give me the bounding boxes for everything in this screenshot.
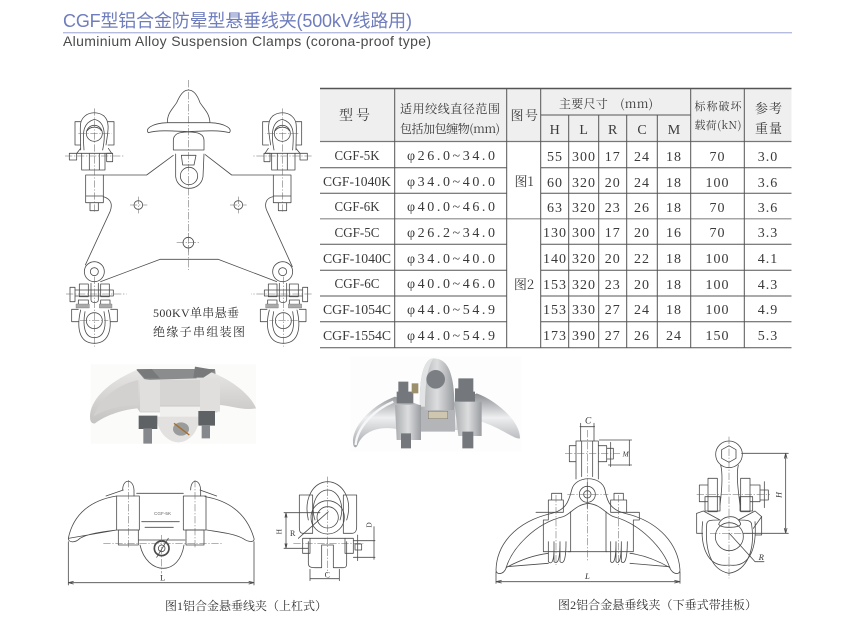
table body: 100 bbox=[706, 303, 730, 318]
diagram: figure 2 clamp front view: C bbox=[585, 416, 592, 426]
table body: 320 bbox=[572, 176, 596, 191]
diagram: figure 1 clamp front view: CGF-5K bbox=[154, 511, 172, 516]
diagram: 500KV insulator string assembly bbox=[65, 80, 312, 347]
table body: φ44.0~54.9 bbox=[407, 329, 495, 344]
diagram: figure 1 clamp front view: L bbox=[160, 573, 165, 583]
table body bbox=[323, 149, 778, 344]
table header: 重量 bbox=[755, 118, 783, 137]
table body: 18 bbox=[666, 278, 682, 293]
table body: 3.6 bbox=[758, 201, 778, 216]
diagram: figure 1 clamp side view: C bbox=[325, 570, 330, 579]
dimension labels bbox=[496, 423, 680, 583]
table body: 70 bbox=[710, 226, 726, 241]
table header: 主要尺寸 (mm) bbox=[559, 95, 653, 112]
table body: 22 bbox=[634, 252, 650, 267]
table body: 150 bbox=[706, 329, 730, 344]
table body: φ34.0~40.0 bbox=[407, 252, 495, 267]
diagram: figure 1 clamp side view bbox=[275, 477, 375, 581]
assembly caption: 绝缘子串组装图 bbox=[153, 324, 245, 339]
table body: 320 bbox=[572, 278, 596, 293]
table header: 型号 bbox=[339, 105, 373, 125]
table body: φ40.0~46.0 bbox=[407, 200, 495, 215]
table body: φ40.0~46.0 bbox=[407, 277, 495, 292]
table body: 300 bbox=[572, 150, 596, 165]
yoke plate outline bbox=[85, 155, 292, 282]
table body: 20 bbox=[605, 176, 621, 191]
table body: 153 bbox=[543, 303, 567, 318]
table: specifications bbox=[320, 88, 792, 348]
table header bbox=[339, 95, 783, 138]
diagram: figure 1 clamp front view bbox=[68, 480, 254, 585]
table body: CGF-5K bbox=[334, 149, 380, 164]
title rule bbox=[63, 32, 792, 33]
table body: 173 bbox=[543, 329, 567, 344]
table body: φ34.0~40.0 bbox=[407, 175, 495, 190]
diagram: figure 2 clamp side view: H bbox=[775, 491, 784, 499]
assembly caption bbox=[153, 305, 245, 339]
table body: 24 bbox=[634, 176, 650, 191]
table header: H bbox=[550, 123, 560, 138]
table body: 18 bbox=[666, 176, 682, 191]
table header: 参考 bbox=[755, 98, 783, 117]
diagram: figure 1 clamp side view: D bbox=[365, 522, 374, 528]
table body: 图1 bbox=[514, 171, 534, 190]
table body: 3.6 bbox=[758, 176, 778, 191]
table body: 23 bbox=[605, 201, 621, 216]
table body: 27 bbox=[605, 303, 621, 318]
table body: 300 bbox=[572, 226, 596, 241]
table body: 20 bbox=[634, 278, 650, 293]
table body: 3.0 bbox=[758, 150, 778, 165]
table body: 3.3 bbox=[758, 226, 778, 241]
table body: φ26.2~34.0 bbox=[407, 226, 495, 241]
assembly caption: 500KV单串悬垂 bbox=[153, 305, 239, 320]
table body: 70 bbox=[710, 150, 726, 165]
table body: 5.3 bbox=[758, 329, 778, 344]
caption: figure 2: 图2铝合金悬垂线夹（下垂式带挂板） bbox=[558, 597, 757, 612]
table header: 图号 bbox=[510, 105, 540, 124]
table body: 63 bbox=[547, 201, 563, 216]
table body: 20 bbox=[605, 252, 621, 267]
table body: 17 bbox=[605, 226, 621, 241]
diagram: figure 2 clamp side view bbox=[697, 437, 788, 578]
table body: CGF-1040C bbox=[323, 252, 391, 267]
table body: 60 bbox=[547, 176, 563, 191]
icon: insulator bbox=[147, 90, 230, 150]
table body: 4.3 bbox=[758, 278, 778, 293]
diagram: figure 1 clamp side view: H bbox=[275, 528, 284, 534]
table body: CGF-6K bbox=[334, 200, 380, 215]
table body: CGF-5C bbox=[334, 226, 380, 241]
table header: C bbox=[637, 123, 647, 138]
table body: 153 bbox=[543, 278, 567, 293]
table body: 330 bbox=[572, 303, 596, 318]
table body: 55 bbox=[547, 150, 563, 165]
table body: 23 bbox=[605, 278, 621, 293]
table body: 17 bbox=[605, 150, 621, 165]
table body: 24 bbox=[634, 150, 650, 165]
table body: 70 bbox=[710, 201, 726, 216]
table body: φ44.0~54.9 bbox=[407, 303, 495, 318]
table header: R bbox=[608, 123, 618, 138]
table body: 18 bbox=[666, 201, 682, 216]
diagram: figure 2 clamp front view: L bbox=[584, 571, 590, 581]
table body: 16 bbox=[666, 226, 682, 241]
table header: L bbox=[579, 123, 588, 138]
table body: 26 bbox=[634, 329, 650, 344]
photo: overhead type clamp bbox=[90, 364, 256, 444]
subtitle: Aluminium Alloy Suspension Clamps (corona-proof type) bbox=[63, 33, 431, 49]
table body: φ26.0~34.0 bbox=[407, 149, 495, 164]
table header: 包括加包缠物(mm) bbox=[400, 120, 500, 137]
diagram: figure 2 clamp side view: R bbox=[758, 552, 765, 562]
table body: 20 bbox=[634, 226, 650, 241]
photo: suspension type clamp with lug bbox=[350, 357, 522, 452]
table body: CGF-6C bbox=[334, 277, 380, 292]
diagram: figure 2 clamp front view: M bbox=[622, 450, 630, 459]
diagram: figure 1 clamp side view: R bbox=[290, 529, 296, 538]
table body: 4.1 bbox=[758, 252, 778, 267]
title: CGF型铝合金防晕型悬垂线夹(500kV线路用) bbox=[63, 11, 412, 31]
table header: 适用绞线直径范围 bbox=[400, 100, 500, 117]
table body: 100 bbox=[706, 252, 730, 267]
table body: 390 bbox=[572, 329, 596, 344]
table header: 标称破坏 bbox=[694, 98, 742, 114]
table body: 24 bbox=[666, 329, 682, 344]
table body: CGF-1054C bbox=[323, 303, 391, 318]
table body: 320 bbox=[572, 252, 596, 267]
table body: 24 bbox=[634, 303, 650, 318]
table body: 27 bbox=[605, 329, 621, 344]
table body: 100 bbox=[706, 176, 730, 191]
table body: 140 bbox=[543, 252, 567, 267]
table body: CGF-1554C bbox=[323, 329, 391, 344]
table body: 18 bbox=[666, 252, 682, 267]
table body: 18 bbox=[666, 150, 682, 165]
table body: 100 bbox=[706, 278, 730, 293]
table header: M bbox=[668, 123, 681, 138]
diagram: figure 2 clamp front view bbox=[496, 416, 680, 583]
table body: 320 bbox=[572, 201, 596, 216]
table body: 图2 bbox=[514, 274, 534, 293]
table body: 4.9 bbox=[758, 303, 778, 318]
dimension L bbox=[68, 542, 254, 585]
table body: 130 bbox=[543, 226, 567, 241]
table header: 载荷(kN) bbox=[694, 117, 742, 133]
clevis bbox=[176, 154, 204, 188]
table body: 18 bbox=[666, 303, 682, 318]
caption: figure 1: 图1铝合金悬垂线夹（上杠式） bbox=[165, 598, 327, 613]
table body: CGF-1040K bbox=[323, 175, 391, 190]
table body: 26 bbox=[634, 201, 650, 216]
